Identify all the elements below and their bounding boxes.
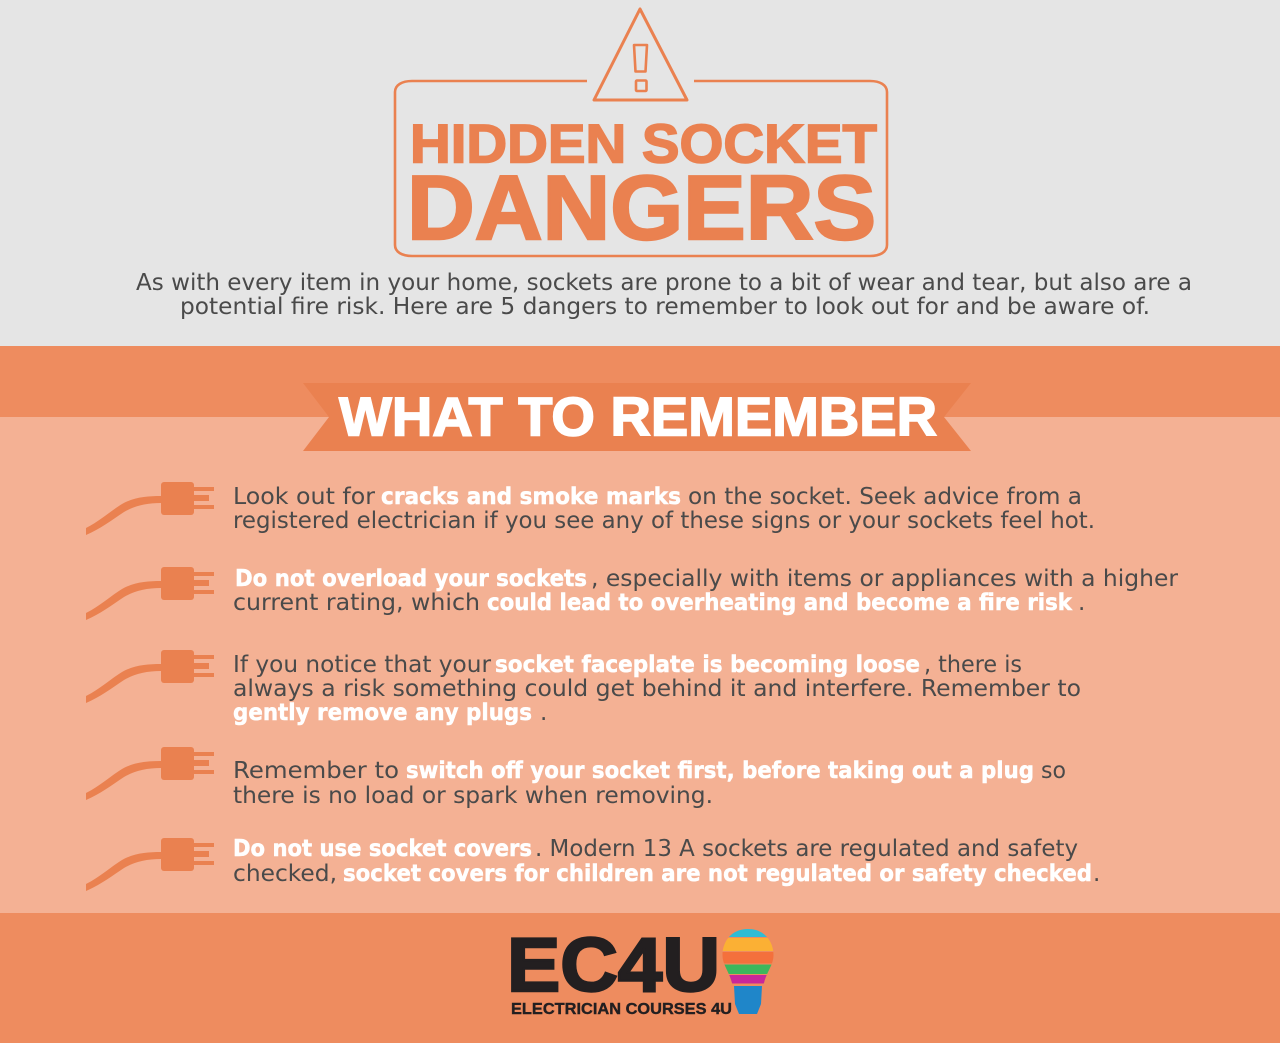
- tip 1 text: registered electrician if you see any of these signs or your sockets feel hot.: [233, 508, 1095, 534]
- tip 2 text: Do not overload your sockets: [235, 566, 587, 592]
- title frame: [395, 81, 887, 256]
- icon: plug: [86, 567, 214, 620]
- icon: exclamation dot: [636, 80, 646, 91]
- tip 5: [86, 836, 1100, 891]
- tip 1 text: on the socket. Seek advice from a: [688, 484, 1082, 510]
- tip 4 text: [233, 758, 1066, 809]
- icon: plug: [86, 650, 214, 703]
- warning sign frame: [395, 9, 887, 256]
- tip 4: [86, 747, 1066, 809]
- tip 5 text: socket covers for children are not regulated or safety checked: [343, 861, 1092, 887]
- tip 3 text: , there is: [924, 652, 1022, 678]
- intro text: [136, 270, 1192, 320]
- title: [407, 112, 877, 259]
- logo wordmark: EC4U: [507, 923, 720, 1008]
- panel: footer: [0, 913, 1280, 1043]
- tip 2 text: .: [1078, 590, 1085, 616]
- icon: striped light bulb: [722, 929, 774, 1014]
- tip 2 text: current rating, which: [233, 590, 480, 616]
- panel: header background: [0, 0, 1280, 346]
- tip 3 text: always a risk something could get behind it and interfere. Remember to: [233, 676, 1081, 702]
- tip 2 text: [233, 566, 1179, 616]
- tip 4 text: switch off your socket first, before taking out a plug: [406, 758, 1034, 784]
- title: HIDDEN SOCKET: [410, 112, 877, 174]
- icon: plug: [86, 482, 214, 535]
- tip 4 text: so: [1041, 758, 1066, 784]
- tip 5 text: [233, 836, 1100, 887]
- tip 3 text: [233, 652, 1081, 726]
- tip 1 text: Look out for: [233, 484, 376, 510]
- tip 1 text: cracks and smoke marks: [381, 484, 681, 510]
- panel: heading band: [0, 346, 1280, 417]
- tip 2: [86, 566, 1179, 620]
- heading: WHAT TO REMEMBER: [339, 386, 937, 448]
- tip 3: [86, 650, 1081, 726]
- tip 3 text: socket faceplate is becoming loose: [495, 652, 920, 678]
- icon: exclamation bar: [634, 45, 647, 72]
- intro text: As with every item in your home, sockets are prone to a bit of wear and tear, but also are a: [136, 270, 1192, 296]
- tip 3 text: .: [540, 700, 547, 726]
- tip 4 text: Remember to: [233, 758, 399, 784]
- tip 3 text: If you notice that your: [233, 652, 492, 678]
- tip 5 text: . Modern 13 A sockets are regulated and safety: [535, 836, 1078, 862]
- icon: plug: [86, 747, 214, 800]
- intro text: potential fire risk. Here are 5 dangers to remember to look out for and be aware of.: [180, 294, 1150, 320]
- heading ribbon: [303, 383, 971, 451]
- tip 4 text: there is no load or spark when removing.: [233, 783, 713, 809]
- tip 3 text: gently remove any plugs: [233, 700, 532, 726]
- tip 1 text: [233, 484, 1095, 534]
- icon: warning triangle: [594, 9, 687, 100]
- panel: tips background: [0, 417, 1280, 913]
- tip 2 text: , especially with items or appliances with a higher: [591, 566, 1179, 592]
- logo: [511, 929, 774, 1014]
- icon: plug: [86, 838, 214, 891]
- logo tagline: ELECTRICIAN COURSES 4U: [511, 1001, 732, 1018]
- tip 5 text: checked,: [233, 861, 337, 887]
- tip 2 text: could lead to overheating and become a fire risk: [487, 590, 1073, 616]
- ribbon shape: [303, 383, 971, 451]
- tip 1: [86, 482, 1095, 535]
- title: DANGERS: [407, 158, 876, 259]
- tip 5 text: Do not use socket covers: [233, 836, 532, 862]
- tip 5 text: .: [1093, 861, 1100, 887]
